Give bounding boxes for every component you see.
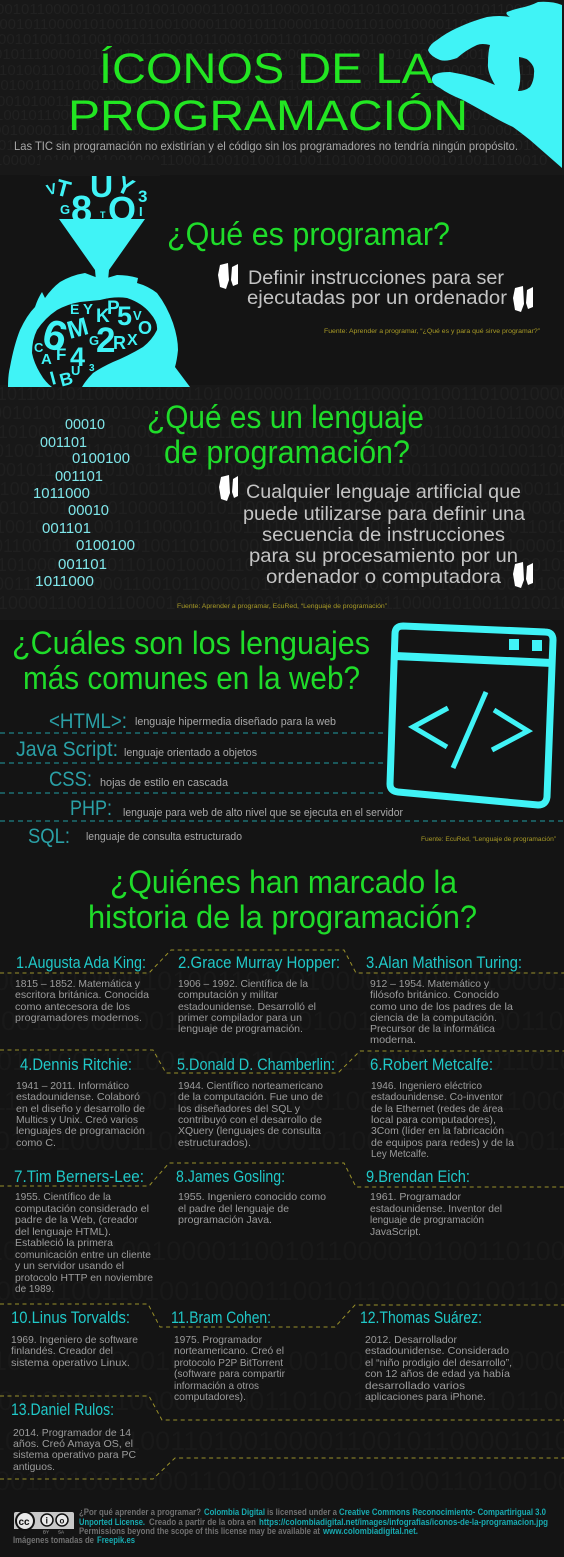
- heading: ¿Qué es un lenguaje de programación?: [147, 399, 424, 470]
- person 1: Augusta Ada King: escritora británica. Conocida: [15, 989, 149, 1001]
- person 4: Dennis Ritchie: estadounidense. Colaboró: [16, 1091, 140, 1103]
- person 1: Augusta Ada King: 1815 – 1852. Matemática y: [15, 978, 141, 990]
- person 3: Alan Mathison Turing: 912 – 1954. Matemático y: [370, 978, 490, 990]
- person 6: Robert Metcalfe: estadounidense. Co-inventor: [371, 1091, 503, 1103]
- icon: funnel pouring letters into a head: 6: [38, 309, 73, 361]
- quote: definition of programming: Definir instrucciones para ser: [248, 267, 505, 289]
- title: [68, 45, 468, 140]
- list: common web languages: SQL:: [28, 825, 70, 848]
- infographic canvas: 0110110010100110100100001100101100001010011010010000110010110000101: [0, 137, 548, 154]
- binary code column: 00010: [68, 502, 109, 519]
- binary code column: 1011000: [33, 485, 90, 502]
- person 6: Robert Metcalfe: 1946. Ingeniero eléctrico: [371, 1080, 482, 1092]
- person 7: Tim Berners-Lee: padre de la Web, (creador: [15, 1214, 139, 1226]
- title: ÍCONOS DE LA: [99, 45, 433, 93]
- person 5: Donald D. Chamberlin: 1944. Científico norteamericano: [178, 1080, 323, 1092]
- infographic canvas: 0010110000101001101001000011001011000010100110100100001100: [0, 460, 564, 480]
- person 11: Bram Cohen: (software para compartir: [174, 1368, 285, 1380]
- list: common web languages: lenguaje orientado a objetos: [124, 747, 257, 759]
- icon: Creative Commons BY-SA badge: SA: [58, 1530, 64, 1534]
- binary code column: [33, 416, 135, 590]
- infographic canvas: 1010011010010000110010110000101001101001000011001011000010: [0, 422, 564, 442]
- icon: funnel pouring letters into a head: T: [53, 174, 74, 203]
- quote: definition of programming language: ordenador o computadora: [266, 566, 501, 588]
- person 5: Donald D. Chamberlin: XQuery (lenguajes de consulta: [178, 1125, 321, 1137]
- icon: Creative Commons BY-SA badge: o: [60, 1516, 64, 1526]
- person 13: Daniel Rulos: antiguos.: [13, 1461, 55, 1473]
- subtitle: Las TIC sin programación no existirían y el código sin los programadores no tendría ningún propósito.: [14, 139, 518, 153]
- person 7: Tim Berners-Lee: Estableció la primera: [15, 1237, 113, 1249]
- icon: funnel pouring letters into a head: U: [90, 168, 113, 204]
- person 3: Alan Mathison Turing: [366, 954, 522, 1046]
- person 9: Brendan Eich: 9.Brendan Eich:: [366, 1168, 470, 1186]
- person 12: Thomas Suárez: 12.Thomas Suárez:: [360, 1309, 482, 1327]
- person 4: Dennis Ritchie: Multics y Unix. Creó varios: [16, 1114, 138, 1126]
- license and credits: ¿Por qué aprender a programar?: [79, 1507, 201, 1518]
- list: common web languages: CSS:: [49, 768, 92, 791]
- list: common web languages: lenguaje para web de alto nivel que se ejecuta en el servidor: [123, 807, 403, 819]
- infographic canvas: 0010110000101001101001000011001011000010100110100100001100101100001: [0, 1, 547, 18]
- license and credits: www.colombiadigital.net.: [322, 1526, 418, 1537]
- person 4: Dennis Ritchie: 4.Dennis Ritchie:: [20, 1056, 132, 1074]
- infographic canvas: 0101001101001000011001011000010100110100100001100101100001: [0, 498, 564, 518]
- license and credits: Unported License.: [79, 1517, 145, 1528]
- person 3: Alan Mathison Turing: moderna.: [370, 1034, 416, 1046]
- infographic canvas: 0010100110100100001100101100001010011010010000110010110000: [0, 403, 564, 423]
- icon: Creative Commons BY-SA badge: i: [46, 1516, 48, 1526]
- person 11: Bram Cohen: 11.Bram Cohen:: [171, 1309, 271, 1327]
- person 7: Tim Berners-Lee: de 1989.: [15, 1283, 54, 1295]
- person 2: Grace Murray Hopper: computación y militar: [178, 989, 279, 1001]
- person 9: Brendan Eich: lenguaje de programación: [370, 1214, 484, 1226]
- person 3: Alan Mathison Turing: 3.Alan Mathison Turing:: [366, 954, 522, 972]
- person 6: Robert Metcalfe: 6.Robert Metcalfe:: [370, 1056, 493, 1074]
- person 8: James Gosling: programación Java.: [178, 1214, 272, 1226]
- person 11: Bram Cohen: 1975. Programador: [174, 1334, 262, 1346]
- infographic canvas: 0110010110000101001101001000011001011000010100110100100001: [0, 536, 564, 556]
- person 10: Linus Torvalds: 1969. Ingeniero de software: [11, 1334, 138, 1346]
- person 12: Thomas Suárez: 2012. Desarrollador: [365, 1334, 458, 1346]
- person 12: Thomas Suárez: aplicaciones para iPhone.: [365, 1391, 486, 1403]
- icon: funnel pouring letters into a head: X: [127, 332, 138, 349]
- person 2: Grace Murray Hopper: estadounidense. Desarrolló el: [178, 1001, 316, 1013]
- icon: funnel pouring letters into a head: T: [100, 210, 106, 220]
- icon: funnel pouring letters into a head: G: [60, 202, 70, 217]
- icon: funnel pouring letters into a head: I: [139, 204, 143, 219]
- person 5: Donald D. Chamberlin: de la computación. Fue uno de: [178, 1091, 323, 1103]
- person 9: Brendan Eich: [366, 1168, 502, 1238]
- quote: definition of programming language: secuencia de instrucciones: [262, 524, 505, 546]
- icon: funnel pouring letters into a head: M: [64, 312, 91, 345]
- person 2: Grace Murray Hopper: 2.Grace Murray Hopper:: [178, 954, 340, 972]
- binary code column: 0100100: [76, 537, 135, 554]
- quote: definition of programming language: puede utilizarse para definir una: [243, 503, 525, 525]
- binary code column: 00010: [65, 416, 105, 433]
- person 10: Linus Torvalds: 10.Linus Torvalds:: [11, 1309, 130, 1327]
- icon: funnel pouring letters into a head: 8: [71, 189, 92, 231]
- person 7: Tim Berners-Lee: protocolo HTTP en noviembre: [15, 1272, 153, 1284]
- person 8: James Gosling: 8.James Gosling:: [176, 1168, 285, 1186]
- infographic canvas: 1001000011001011000010100110100100001100101100001010011010: [0, 517, 564, 537]
- icon: funnel pouring letters into a head: 4: [70, 342, 85, 372]
- icon: funnel pouring letters into a head: 3: [138, 187, 147, 206]
- person 10: Linus Torvalds: sistema operativo Linux.: [11, 1357, 130, 1369]
- person 13: Daniel Rulos: [11, 1401, 136, 1473]
- person 7: Tim Berners-Lee: computación considerado el: [15, 1203, 149, 1215]
- person 13: Daniel Rulos: sistema operativo para PC: [13, 1449, 136, 1461]
- quote: definition of programming: ejecutadas por un ordenador: [247, 287, 508, 309]
- person 2: Grace Murray Hopper: [178, 954, 340, 1035]
- license and credits: [13, 1507, 548, 1546]
- infographic canvas: 0101110000101001101001000011101011000010100110100101011000010100110: [0, 46, 543, 63]
- person 3: Alan Mathison Turing: ciencia de la computación.: [370, 1012, 497, 1024]
- heading: ¿Cuáles son los lenguajes más comunes en la web?: [12, 625, 370, 696]
- person 2: Grace Murray Hopper: primer compilador para un: [178, 1012, 302, 1024]
- heading: ¿Qué es un lenguaje de programación?: de programación?: [164, 434, 410, 470]
- icon: funnel pouring letters into a head: U: [71, 363, 80, 378]
- person 8: James Gosling: 1955. Ingeniero conocido como: [178, 1191, 326, 1203]
- binary code column: 001101: [58, 556, 107, 573]
- icon: funnel pouring letters into a head: G: [89, 333, 99, 348]
- icon: funnel pouring letters into a head: R: [113, 333, 126, 353]
- infographic canvas: 0010000110010110000101001101001000011001011000010100110100100001100: [0, 122, 544, 139]
- icon: funnel pouring letters into a head: Q: [108, 189, 136, 230]
- icon: funnel pouring letters into a head: F: [56, 345, 66, 364]
- heading: ¿Qué es programar?: ¿Qué es programar?: [167, 216, 450, 252]
- source note: Fuente: EcuRed, “Lenguaje de programación”: [421, 836, 556, 843]
- person 13: Daniel Rulos: años. Creó Amaya OS, el: [13, 1438, 133, 1450]
- person 1: Augusta Ada King: [15, 954, 149, 1024]
- list: common web languages: <HTML>:: [49, 710, 127, 733]
- person 5: Donald D. Chamberlin: los diseñadores del SQL y: [178, 1103, 301, 1115]
- quote: definition of programming language: [219, 475, 533, 588]
- license and credits: Creado a partir de la obra en: [149, 1517, 256, 1528]
- infographic canvas: 1000010100110100100011000110010100101001101001000010001010011010010: [0, 152, 547, 169]
- heading: ¿Cuáles son los lenguajes más comunes en la web?: más comunes en la web?: [23, 660, 360, 696]
- person 12: Thomas Suárez: [360, 1309, 512, 1403]
- icon: funnel pouring letters into a head: O: [138, 318, 152, 338]
- person 11: Bram Cohen: norteamericano. Creó el: [174, 1345, 284, 1357]
- person 7: Tim Berners-Lee: comunicación entre un cliente: [15, 1249, 151, 1261]
- binary code column: 001101: [55, 468, 103, 485]
- person 11: Bram Cohen: protocolo P2P BitTorrent: [174, 1357, 283, 1369]
- infographic canvas: 0011010010000110010110000101001101001000011001011000010100: [0, 574, 564, 594]
- person 13: Daniel Rulos: 2014. Programador de 14: [13, 1427, 131, 1439]
- person 7: Tim Berners-Lee: del lenguaje HTML).: [15, 1226, 111, 1238]
- infographic canvas: 1010000101001101001000011001011000010100110100100001100101: [0, 555, 564, 575]
- heading: ¿Quiénes han marcado la historia de la programación?: historia de la programación?: [88, 899, 477, 935]
- person 4: Dennis Ritchie: en el diseño y desarrollo de: [16, 1103, 145, 1115]
- icon: funnel pouring letters into a head: B: [57, 368, 75, 391]
- icon: Creative Commons BY-SA badge: cc: [18, 1517, 30, 1528]
- infographic canvas: 1000011001011000010100110100100001100101100001010011010010: [0, 593, 564, 613]
- person 12: Thomas Suárez: estadounidense. Considerado: [365, 1345, 509, 1357]
- list: common web languages: PHP:: [70, 797, 112, 820]
- heading: ¿Quiénes han marcado la historia de la programación?: [88, 864, 477, 935]
- person 6: Robert Metcalfe: de equipos para redes) y de la: [371, 1137, 514, 1149]
- binary code column: 001101: [42, 520, 91, 537]
- binary code column: 0100100: [72, 450, 130, 467]
- list: common web languages: lenguaje de consulta estructurado: [86, 831, 242, 843]
- icon: funnel pouring letters into a head: Y: [83, 301, 93, 318]
- infographic canvas: 1001011000010100110100100001100101100001010011010010000110010110000: [0, 16, 542, 33]
- person 12: Thomas Suárez: desarrollado varios: [365, 1380, 465, 1392]
- person 1: Augusta Ada King: 1.Augusta Ada King:: [16, 954, 146, 972]
- person 4: Dennis Ritchie: [16, 1056, 145, 1149]
- icon: funnel pouring letters into a head: Y: [112, 171, 138, 202]
- person 9: Brendan Eich: JavaScript.: [370, 1226, 421, 1238]
- person 2: Grace Murray Hopper: lenguaje de programación.: [178, 1023, 303, 1035]
- title: PROGRAMACIÓN: [68, 92, 468, 140]
- person 3: Alan Mathison Turing: filósofo británico. Conocido: [370, 989, 499, 1001]
- license and credits: Freepik.es: [97, 1535, 135, 1546]
- person 8: James Gosling: el padre del lenguaje de: [178, 1203, 289, 1215]
- list: common web languages: [0, 710, 564, 848]
- infographic canvas: 0010100110100100011100010110010100110100100001000101001101001000011: [0, 31, 549, 48]
- icon: Creative Commons BY-SA badge: BY: [43, 1530, 49, 1534]
- person 5: Donald D. Chamberlin: contribuyó con el desarrollo de: [178, 1114, 322, 1126]
- dashed dividers between people: [0, 950, 564, 1479]
- license and credits: Permissions beyond the scope of this license may be available at: [79, 1526, 321, 1537]
- person 6: Robert Metcalfe: 3Com (líder en la fabricación: [371, 1125, 504, 1137]
- infographic canvas: 1001011000010100110100100001100101100001010011010010000110010110001: [0, 107, 546, 124]
- source note: Fuente: Aprender a programar, “¿Qué es y para qué sirve programar?”: [324, 328, 540, 335]
- list: common web languages: lenguaje hipermedia diseñado para la web: [135, 716, 336, 728]
- person 12: Thomas Suárez: el “niño prodigio del desarrollo”,: [365, 1357, 512, 1369]
- binary code column: 001101: [40, 434, 87, 451]
- infographic canvas: 1010011010010000110010101100001010011010010000110010110000101001101: [0, 62, 550, 79]
- person 11: Bram Cohen: información a otros: [174, 1380, 259, 1392]
- icon: funnel pouring letters into a head: V: [45, 180, 59, 199]
- person 4: Dennis Ritchie: como C.: [16, 1137, 56, 1149]
- list: common web languages: Java Script:: [16, 738, 118, 761]
- icon: funnel pouring letters into a head: 2: [96, 321, 115, 360]
- source note: Fuente: Aprender a programar, EcuRed, “Lenguaje de programación”: [177, 603, 387, 610]
- infographic canvas: 1010010110100100001100101100001010011010010000110010110000101001101: [0, 77, 543, 94]
- binary code column: 1011000: [35, 573, 94, 590]
- icon: code window: [390, 626, 553, 805]
- person 6: Robert Metcalfe: local para computadores),: [371, 1114, 496, 1126]
- person 9: Brendan Eich: estadounidense. Inventor del: [370, 1203, 502, 1215]
- person 6: Robert Metcalfe: de la Ethernet (redes de área: [371, 1103, 503, 1115]
- person 3: Alan Mathison Turing: como uno de los padres de la: [370, 1001, 513, 1013]
- quote: definition of programming: [218, 263, 533, 312]
- person 3: Alan Mathison Turing: Precursor de la informática: [370, 1023, 495, 1035]
- license and credits: Colombia Digital: [204, 1507, 265, 1518]
- person 13: Daniel Rulos: 13.Daniel Rulos:: [11, 1401, 114, 1419]
- icon: funnel pouring letters into a head: [8, 160, 190, 391]
- list: common web languages: hojas de estilo en cascada: [100, 777, 229, 789]
- heading: ¿Cuáles son los lenguajes más comunes en la web?: ¿Cuáles son los lenguajes: [12, 625, 370, 661]
- infographic canvas: 0100100001100101100001010011010010000110010110000101001101: [0, 441, 564, 461]
- person 7: Tim Berners-Lee: [14, 1168, 153, 1295]
- person 9: Brendan Eich: 1961. Programador: [370, 1191, 461, 1203]
- person 5: Donald D. Chamberlin: [177, 1056, 335, 1149]
- person 7: Tim Berners-Lee: y un servidor usando el: [15, 1260, 124, 1272]
- infographic canvas: 0010100110100100001100101100001010011010010000110010110000101001101: [0, 93, 548, 110]
- icon: funnel pouring letters into a head: C: [34, 340, 44, 355]
- person 6: Robert Metcalfe: Ley Metcalfe.: [371, 1148, 429, 1160]
- person 12: Thomas Suárez: con 12 años de edad ya había: [365, 1368, 510, 1380]
- person 10: Linus Torvalds: [11, 1309, 138, 1369]
- license and credits: Imágenes tomadas de: [13, 1535, 94, 1546]
- icon: funnel pouring letters into a head: K: [96, 306, 110, 327]
- person 2: Grace Murray Hopper: 1906 – 1992. Científica de la: [178, 978, 308, 990]
- person 6: Robert Metcalfe: [370, 1056, 514, 1160]
- icon: funnel pouring letters into a head: 3: [89, 363, 95, 374]
- quote: definition of programming language: Cualquier lenguaje artificial que: [246, 481, 521, 503]
- person 11: Bram Cohen: [171, 1309, 285, 1403]
- icon: funnel pouring letters into a head: E: [70, 301, 79, 317]
- heading: ¿Qué es un lenguaje de programación?: ¿Qué es un lenguaje: [147, 399, 424, 435]
- icon: funnel pouring letters into a head: A: [41, 351, 52, 368]
- person 1: Augusta Ada King: programadores modernos.: [15, 1012, 142, 1024]
- person 11: Bram Cohen: computadores).: [174, 1391, 246, 1403]
- person 7: Tim Berners-Lee: 1955. Científico de la: [15, 1191, 111, 1203]
- license and credits: is licensed under a: [267, 1507, 338, 1518]
- infographic canvas: 1100101100001010011010010000110010110000101001101001000011: [0, 479, 562, 499]
- person 8: James Gosling: [176, 1168, 326, 1226]
- icon: funnel pouring letters into a head: P: [107, 298, 120, 319]
- infographic canvas: 1011001011000010100110100100001100101100001010011010010000: [0, 384, 564, 404]
- heading: ¿Quiénes han marcado la historia de la programación?: ¿Quiénes han marcado la: [110, 864, 457, 900]
- person 7: Tim Berners-Lee: 7.Tim Berners-Lee:: [14, 1168, 144, 1186]
- person 1: Augusta Ada King: como antecesora de los: [15, 1001, 130, 1013]
- icon: hand pinching title: [428, 2, 562, 168]
- icon: funnel pouring letters into a head: I: [48, 368, 58, 390]
- quote: definition of programming language: para su procesamiento por un: [249, 545, 518, 567]
- person 5: Donald D. Chamberlin: estructurados).: [178, 1137, 251, 1149]
- person 10: Linus Torvalds: finlandés. Creador del: [11, 1345, 113, 1357]
- person 4: Dennis Ritchie: 1941 – 2011. Informático: [16, 1080, 129, 1092]
- person 4: Dennis Ritchie: lenguajes de programación: [16, 1125, 145, 1137]
- person 5: Donald D. Chamberlin: 5.Donald D. Chamberlin:: [177, 1056, 335, 1074]
- icon: funnel pouring letters into a head: 5: [117, 301, 132, 331]
- icon: Creative Commons BY-SA badge: [14, 1512, 74, 1534]
- icon: funnel pouring letters into a head: V: [133, 308, 142, 323]
